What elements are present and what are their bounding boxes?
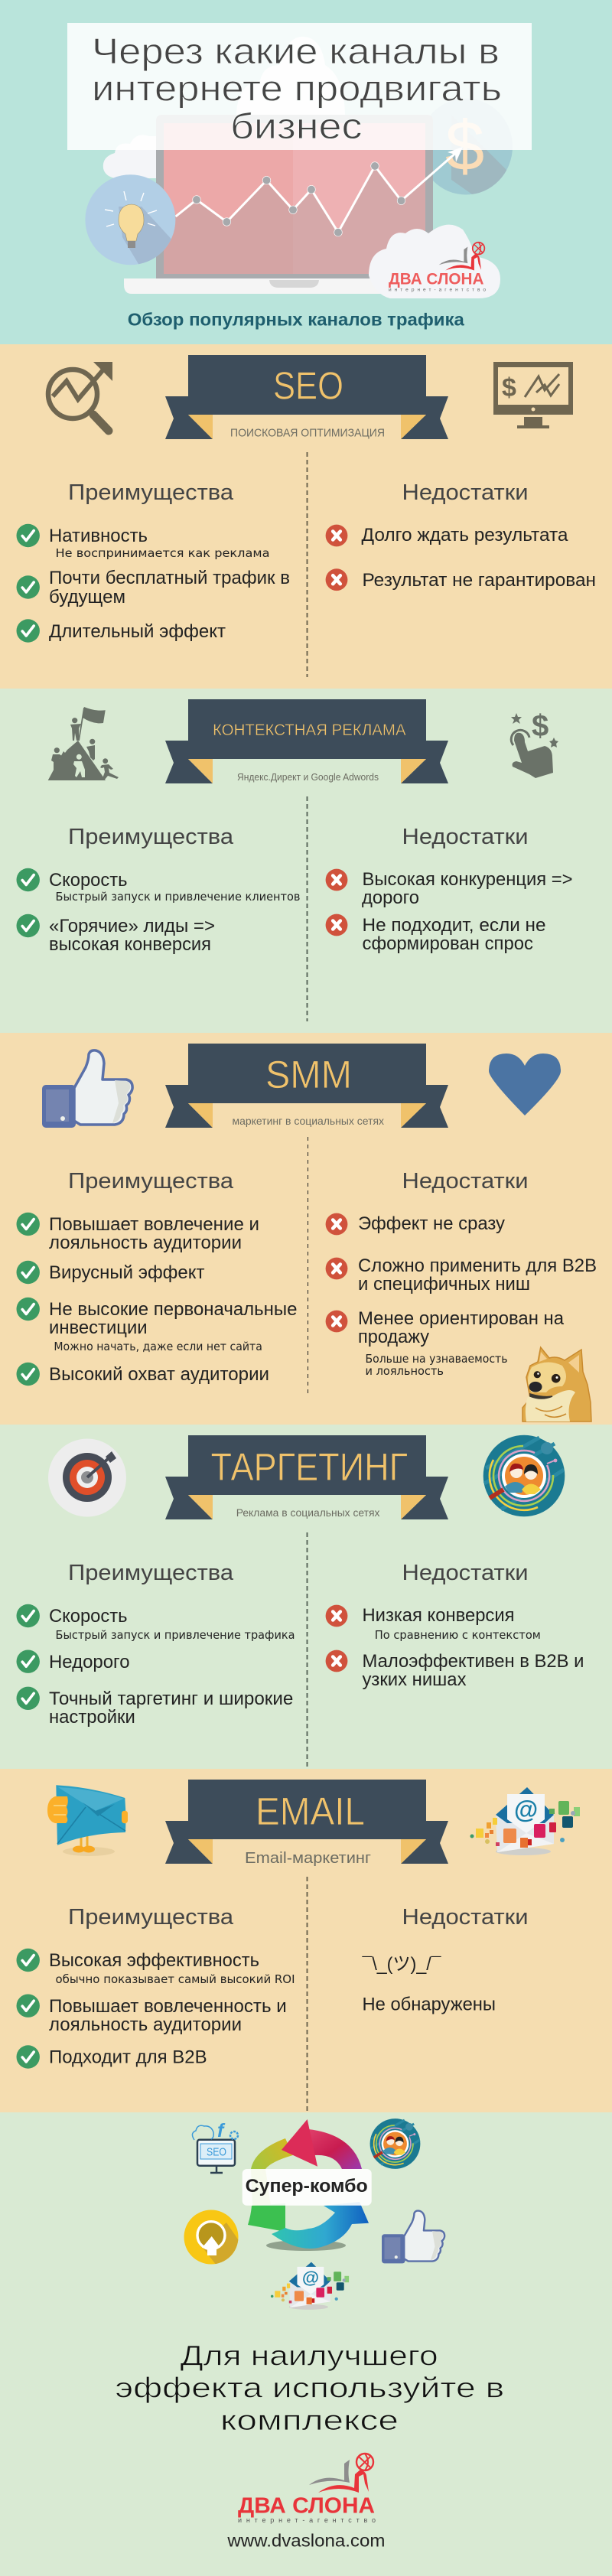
banner: SMM: SMM — [265, 1053, 352, 1096]
pro: скорость: Быстрый запуск и привлечение трафика — [55, 1628, 295, 1642]
pro: таргетинг — [17, 1687, 293, 1728]
pro: бесплатный трафик: Почти бесплатный трафик в — [49, 568, 290, 588]
con: спрос: Не подходит, если не — [363, 915, 546, 936]
pro: инвестиции: инвестиции — [49, 1317, 148, 1338]
subtitle: Обзор популярных каналов трафика — [128, 310, 464, 330]
pro: B2B: Подходит для B2B — [49, 2047, 207, 2068]
icon: climbers with flag — [48, 707, 119, 780]
label: супер-комбо: Супер-комбо — [246, 2176, 368, 2197]
con: конверсия — [326, 1605, 541, 1642]
pro: инвестиции — [17, 1298, 297, 1353]
illustration: dollar circle — [433, 118, 513, 194]
banner: таргетинг: ТАРГЕТИНГ — [211, 1445, 408, 1489]
closing text — [115, 2340, 504, 2436]
pro: длительный эффект: Длительный эффект — [49, 621, 226, 642]
pro: скорость: Скорость — [49, 1606, 127, 1627]
panel: SMM — [0, 1033, 612, 1425]
icon: thumbs up — [42, 1050, 132, 1128]
line chart — [176, 147, 463, 236]
heading: pros: Преимущества — [68, 1561, 234, 1585]
icon: cycle arrows — [248, 2119, 369, 2251]
icon: monitor with chart: $ — [502, 373, 516, 402]
banner: SEO — [165, 355, 448, 440]
banner: SEO: SEO — [273, 364, 343, 408]
con: долго ждать: Долго ждать результата — [361, 525, 568, 545]
logo cloud — [369, 225, 500, 298]
icon: clicking hand — [511, 709, 558, 778]
pro: скорость — [17, 868, 300, 904]
icon: target — [48, 1438, 126, 1516]
banner: SMM — [165, 1044, 448, 1128]
title — [92, 31, 502, 146]
logo — [238, 2454, 376, 2524]
pro: вовлечение — [17, 1213, 259, 1253]
pro: бесплатный трафик — [17, 568, 290, 607]
panel: email — [0, 1769, 612, 2112]
heading: pros: Преимущества — [68, 825, 234, 849]
banner: email: Email-маркетинг — [245, 1850, 371, 1867]
icon: heart — [489, 1054, 561, 1115]
pro: вирусный: Вирусный эффект — [49, 1262, 205, 1283]
pro: скорость: Скорость — [49, 870, 127, 891]
icon: clicking hand: $ — [532, 709, 549, 743]
panel: combo — [116, 2118, 503, 2546]
banner: email: EMAIL — [256, 1790, 365, 1833]
pro: Нативность — [17, 524, 269, 560]
icon: monitor with chart — [493, 362, 573, 428]
banner: SEO: ПОИСКОВАЯ ОПТИМИЗАЦИЯ — [230, 427, 385, 440]
panel: SEO — [0, 344, 612, 689]
pro: инвестиции: Можно начать, даже если нет сайта — [54, 1340, 262, 1353]
icon: SEO monitor: f — [217, 2120, 226, 2141]
icon: thumbs up — [382, 2211, 444, 2263]
con: B2B: Сложно применить для B2B — [358, 1255, 597, 1276]
pro: недорого — [17, 1649, 130, 1673]
icon: magnifier with chart arrow — [48, 362, 112, 431]
heading: pros: Преимущества — [68, 480, 234, 505]
pro: горячие лиды: «Горячие» лиды => — [49, 916, 215, 936]
icon: doge — [522, 1347, 591, 1422]
banner: контекстная реклама: КОНТЕКСТНАЯ РЕКЛАМА — [213, 721, 406, 739]
con: продажи: Больше на узнаваемость — [366, 1352, 508, 1366]
pro: Нативность: Нативность — [49, 526, 148, 546]
title backdrop — [67, 23, 532, 150]
con: продажи: продажу — [358, 1327, 430, 1347]
banner: SMM: маркетинг в социальных сетях — [233, 1115, 384, 1127]
title: бизнес — [230, 106, 363, 146]
icon: yellow click — [184, 2210, 239, 2265]
pro: эффективность: обычно показывает самый высокий ROI — [55, 1972, 295, 1986]
pro: вовлечение: лояльность аудитории — [49, 1233, 242, 1253]
title: интернете продвигать — [92, 68, 502, 109]
heading: cons: Недостатки — [402, 1169, 528, 1194]
pro: эффективность: Высокая эффективность — [49, 1950, 259, 1971]
con: конверсия: Низкая конверсия — [363, 1605, 514, 1626]
con: малоэффективен — [326, 1650, 584, 1690]
logo cloud: интернет-агентство — [389, 288, 486, 293]
con: продажи — [326, 1308, 564, 1378]
closing text: комплексе — [220, 2405, 399, 2436]
con: не обнаружены: Не обнаружены — [363, 1995, 496, 2015]
logo: ДВА СЛОНА — [238, 2493, 375, 2518]
icon: SEO monitor: SEO — [207, 2146, 226, 2159]
closing text: эффекта используйте в — [115, 2372, 504, 2404]
panel: таргетинг — [0, 1425, 612, 1769]
con: B2B: и специфичных ниш — [358, 1274, 530, 1295]
illustration: dollar circle: $ — [445, 107, 484, 185]
icon: audience targeting — [370, 2118, 420, 2169]
pro: охват: Высокий охват аудитории — [49, 1364, 269, 1385]
banner: таргетинг — [165, 1435, 448, 1519]
pro: бесплатный трафик: будущем — [49, 587, 125, 607]
con: малоэффективен: Малоэффективен в B2B и — [363, 1651, 584, 1672]
closing text: Для наилучшего — [181, 2340, 438, 2372]
con: конкуренция: дорого — [362, 887, 419, 908]
pro: эффективность — [17, 1949, 295, 1986]
pro: вовлечение: Повышает вовлечение и — [49, 1214, 259, 1235]
pro: скорость: Быстрый запуск и привлечение клиентов — [55, 890, 300, 904]
illustration: laptop — [124, 115, 433, 294]
heading: cons: Недостатки — [402, 1905, 528, 1930]
con: спрос: сформирован спрос — [363, 933, 533, 954]
icon: SEO monitor — [192, 2120, 238, 2173]
con: спрос — [326, 914, 546, 954]
logo cloud: ДВА СЛОНА — [389, 271, 483, 288]
pro: недорого: Недорого — [49, 1652, 130, 1672]
con: не гарантирован: Результат не гарантирован — [363, 570, 596, 591]
con: B2B — [326, 1255, 597, 1295]
pro: Нативность: Не воспринимается как реклама — [55, 546, 269, 560]
con: малоэффективен: узких нишах — [363, 1669, 467, 1690]
con: эффект не сразу: Эффект не сразу — [358, 1213, 506, 1234]
con: конверсия: По сравнению с контекстом — [375, 1628, 541, 1642]
con: конкуренция — [326, 869, 572, 908]
banner: контекстная реклама: Яндекс.Директ и Google Adwords — [237, 771, 379, 783]
pro: вовлеченность: Повышает вовлеченность и — [49, 1996, 287, 2017]
icon: light bulb — [86, 174, 176, 265]
logo: интернет-агентство — [238, 2516, 376, 2524]
con: продажи: Менее ориентирован на — [358, 1308, 564, 1329]
heading: pros: Преимущества — [68, 1169, 234, 1194]
heading: pros: Преимущества — [68, 1905, 234, 1930]
website: www.dvaslona.com — [226, 2531, 385, 2551]
banner: email — [165, 1780, 448, 1867]
banner: таргетинг: Реклама в социальных сетях — [236, 1506, 379, 1519]
pro: таргетинг: Точный таргетинг и широкие — [49, 1689, 293, 1709]
pro: горячие лиды — [17, 914, 215, 955]
heading: cons: Недостатки — [402, 1561, 528, 1585]
illustration: clouds — [103, 37, 345, 178]
icon: audience targeting — [483, 1435, 565, 1516]
con: конкуренция: Высокая конкуренция => — [363, 869, 572, 890]
label: супер-комбо — [243, 2169, 372, 2206]
banner: контекстная реклама — [165, 699, 448, 783]
icon: email cluster — [470, 1787, 580, 1855]
heading: cons: Недостатки — [402, 825, 528, 849]
panel: контекстная реклама — [0, 689, 612, 1033]
pro: инвестиции: Не высокие первоначальные — [49, 1299, 297, 1320]
title: Через какие каналы в — [92, 31, 500, 71]
pro: вовлеченность — [17, 1994, 287, 2035]
con: shrug: ¯\_(ツ)_/¯ — [362, 1954, 441, 1975]
pro: таргетинг: настройки — [49, 1707, 135, 1728]
pro: горячие лиды: высокая конверсия — [49, 934, 211, 955]
pro: скорость — [17, 1604, 295, 1642]
con: продажи: и лояльность — [366, 1364, 444, 1378]
heading: cons: Недостатки — [402, 480, 528, 505]
pro: вовлеченность: лояльность аудитории — [49, 2014, 242, 2035]
icon: envelope character — [47, 1785, 128, 1856]
icon: email cluster — [271, 2262, 349, 2310]
panel: header — [0, 0, 612, 344]
